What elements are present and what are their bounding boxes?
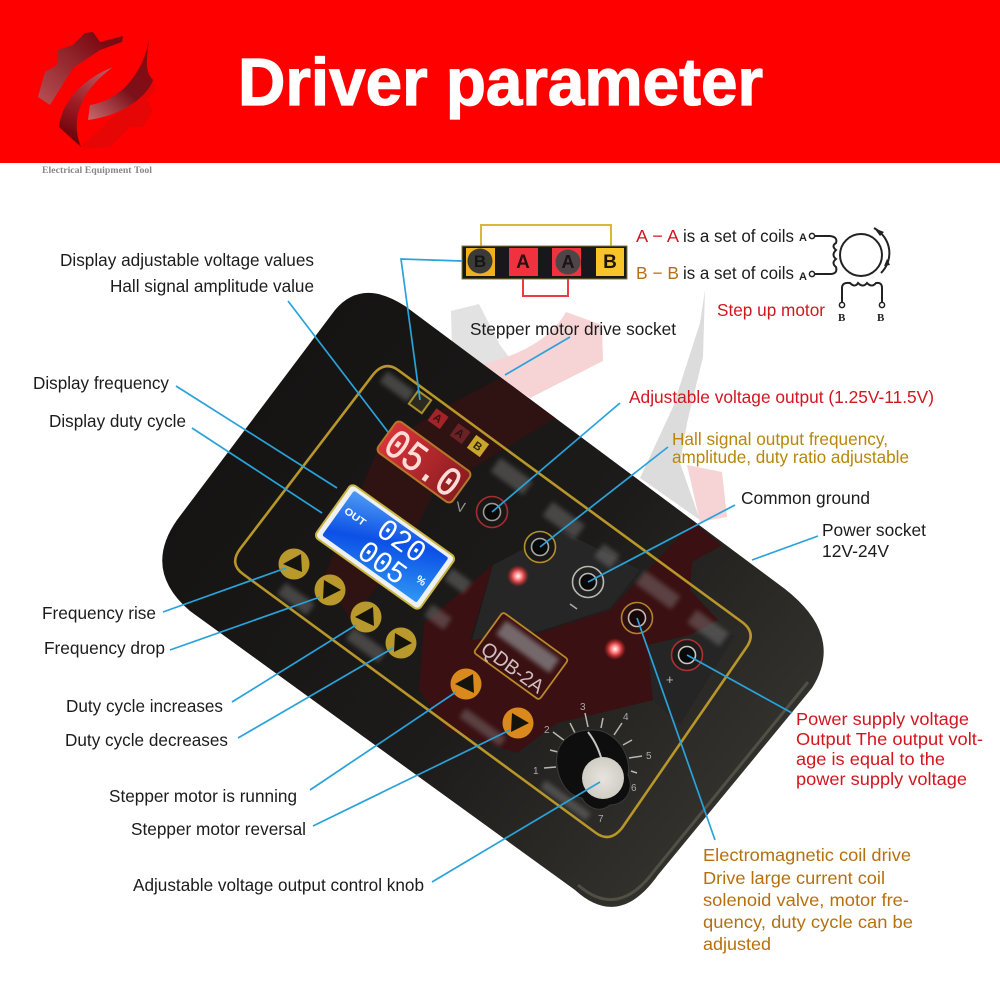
knob numbers [533,702,652,825]
socket label tiles [409,391,489,457]
callout: electromagnetic coil: adjusted [703,934,771,954]
label: drive socket: Stepper motor drive socket [470,319,676,339]
socket: voltage output [476,496,508,528]
plus mark: + [666,672,674,687]
rotation arrow [874,228,889,273]
model plate: QDB-2A [477,638,548,699]
panel tile B gold [467,435,489,457]
blue LCD display: OUT [342,506,368,529]
model plate [473,612,568,701]
button: duty decrease [386,628,416,658]
knob cap [582,757,624,799]
callout: electromagnetic coil: Electromagnetic coil drive [703,845,911,865]
leader lines [163,259,818,882]
label: frequency drop: Frequency drop [44,638,165,658]
A-A coil label [636,226,794,246]
label: control knob: Adjustable voltage output control knob [133,875,424,895]
socket: hall output [524,532,556,562]
blue LCD display: 020 [369,513,432,572]
icon: stepper motor schematic [799,228,890,324]
tile A dark: A [562,252,574,272]
label: display frequency: Display frequency [33,373,169,393]
tile A [509,248,538,276]
label: power socket [822,520,926,561]
callout: power supply voltage: Output The output volt- [796,729,983,749]
knob numbers: 7 [598,814,604,825]
A-A coil label: A − A [636,226,679,246]
logo [38,30,155,175]
indicator LED upper [507,565,529,587]
gold panel outline [235,366,751,837]
logo right swoosh [88,30,153,120]
minus mark [570,604,577,609]
socket label tiles: A [453,427,466,441]
socket: common ground [572,566,604,598]
callout: electromagnetic coil: Drive large current coil [703,868,885,888]
button: motor reverse [502,708,534,738]
blurred panel labels [277,371,729,821]
tile B [596,248,624,276]
icon: stepper motor schematic: B [877,312,885,324]
device casing [162,293,824,907]
logo centre blade [59,67,113,147]
label: duty decreases: Duty cycle decreases [65,730,228,750]
button: frequency rise [278,548,310,580]
label: adjustable voltage output: Adjustable voltage output (1.25V-11.5V) [629,387,934,407]
header band [0,0,1000,163]
knob numbers: 5 [646,751,652,762]
B-B coil label: B − B [636,263,679,283]
knob numbers: 1 [533,766,539,777]
callout: power supply voltage: power supply voltage [796,769,967,789]
motor rotor [840,234,882,276]
label: motor running: Stepper motor is running [109,786,297,806]
label: hall amplitude: Hall signal amplitude value [110,276,314,296]
red voltage display: 05.0 [374,421,470,509]
B-B coil label [636,263,794,283]
knob scale ticks [544,713,642,773]
red wiring bracket [523,278,568,296]
blue LCD display [313,483,456,612]
coil A [815,236,836,274]
step up motor label: Step up motor [717,300,825,320]
label: common ground: Common ground [741,488,870,508]
yellow wiring bracket [481,225,611,248]
knob numbers: 3 [580,702,586,713]
callout: power supply voltage [796,709,983,789]
label: power socket: Power socket [822,520,926,540]
label: duty increases: Duty cycle increases [66,696,223,716]
blue LCD display: % [413,573,428,589]
tile A: A [516,252,530,273]
faded background watermark [451,290,727,522]
logo upper gear [38,32,123,105]
watermark on device: grey circle [648,635,735,725]
label: hall output [672,429,909,467]
knob indicator [588,732,602,760]
watermark on device: upper band [325,378,560,620]
tile B dark [466,248,495,276]
button: motor forward [450,668,482,700]
tile B: B [603,252,617,273]
label: display duty cycle: Display duty cycle [49,411,186,431]
A-A coil label: is a set of coils [683,226,794,246]
icon: stepper motor schematic: B [838,312,846,324]
connector bar [462,246,627,279]
button: frequency drop [314,574,346,606]
callout: power supply voltage: age is equal to the [796,749,945,769]
title: Driver parameter [238,45,763,120]
knob body [557,730,630,809]
label: motor reversal: Stepper motor reversal [131,819,306,839]
socket label tiles: A [431,412,444,426]
stepper socket diagram [462,225,627,296]
panel tile A dark [450,423,471,444]
callout: power supply voltage: Power supply voltage [796,709,969,729]
watermark on device: lower flame [419,522,722,753]
indicator LED lower [604,638,626,660]
tile B dark: B [474,252,486,271]
panel tile A [428,408,449,429]
knob numbers: 4 [623,712,629,723]
logo caption: Electrical Equipment Tool [42,165,153,175]
callout: electromagnetic coil: solenoid valve, motor fre- [703,890,909,910]
logo lower gear [80,78,155,148]
unit V: V [455,498,467,516]
watermark on device: grey zone [472,530,640,640]
label: display voltage: Display adjustable voltage values [60,250,314,270]
device lower rim highlight [578,682,808,900]
blue LCD display: 005 [350,535,412,594]
icon: stepper motor schematic: A [799,232,807,244]
device body [162,293,824,907]
callout: electromagnetic coil: quency, duty cycle can be [703,912,913,932]
coil B [842,283,882,303]
label: frequency rise: Frequency rise [42,603,156,623]
knob numbers: 6 [631,783,637,794]
socket label tiles: B [471,440,484,454]
icon: stepper motor schematic: A [799,271,807,283]
watermark on device [325,378,735,753]
control knob [533,702,652,825]
button: duty increase [350,602,382,632]
callout: electromagnetic coil [703,845,913,954]
knob numbers: 2 [544,725,550,736]
socket: coil drive [622,602,652,634]
panel tile B dark [409,391,431,413]
B-B coil label: is a set of coils [683,263,794,283]
socket: power [672,640,702,670]
label: power socket: 12V-24V [822,541,889,561]
label: hall output: amplitude, duty ratio adjustable [672,447,909,467]
tile A dark [552,248,581,276]
label: hall output: Hall signal output frequency, [672,429,888,449]
